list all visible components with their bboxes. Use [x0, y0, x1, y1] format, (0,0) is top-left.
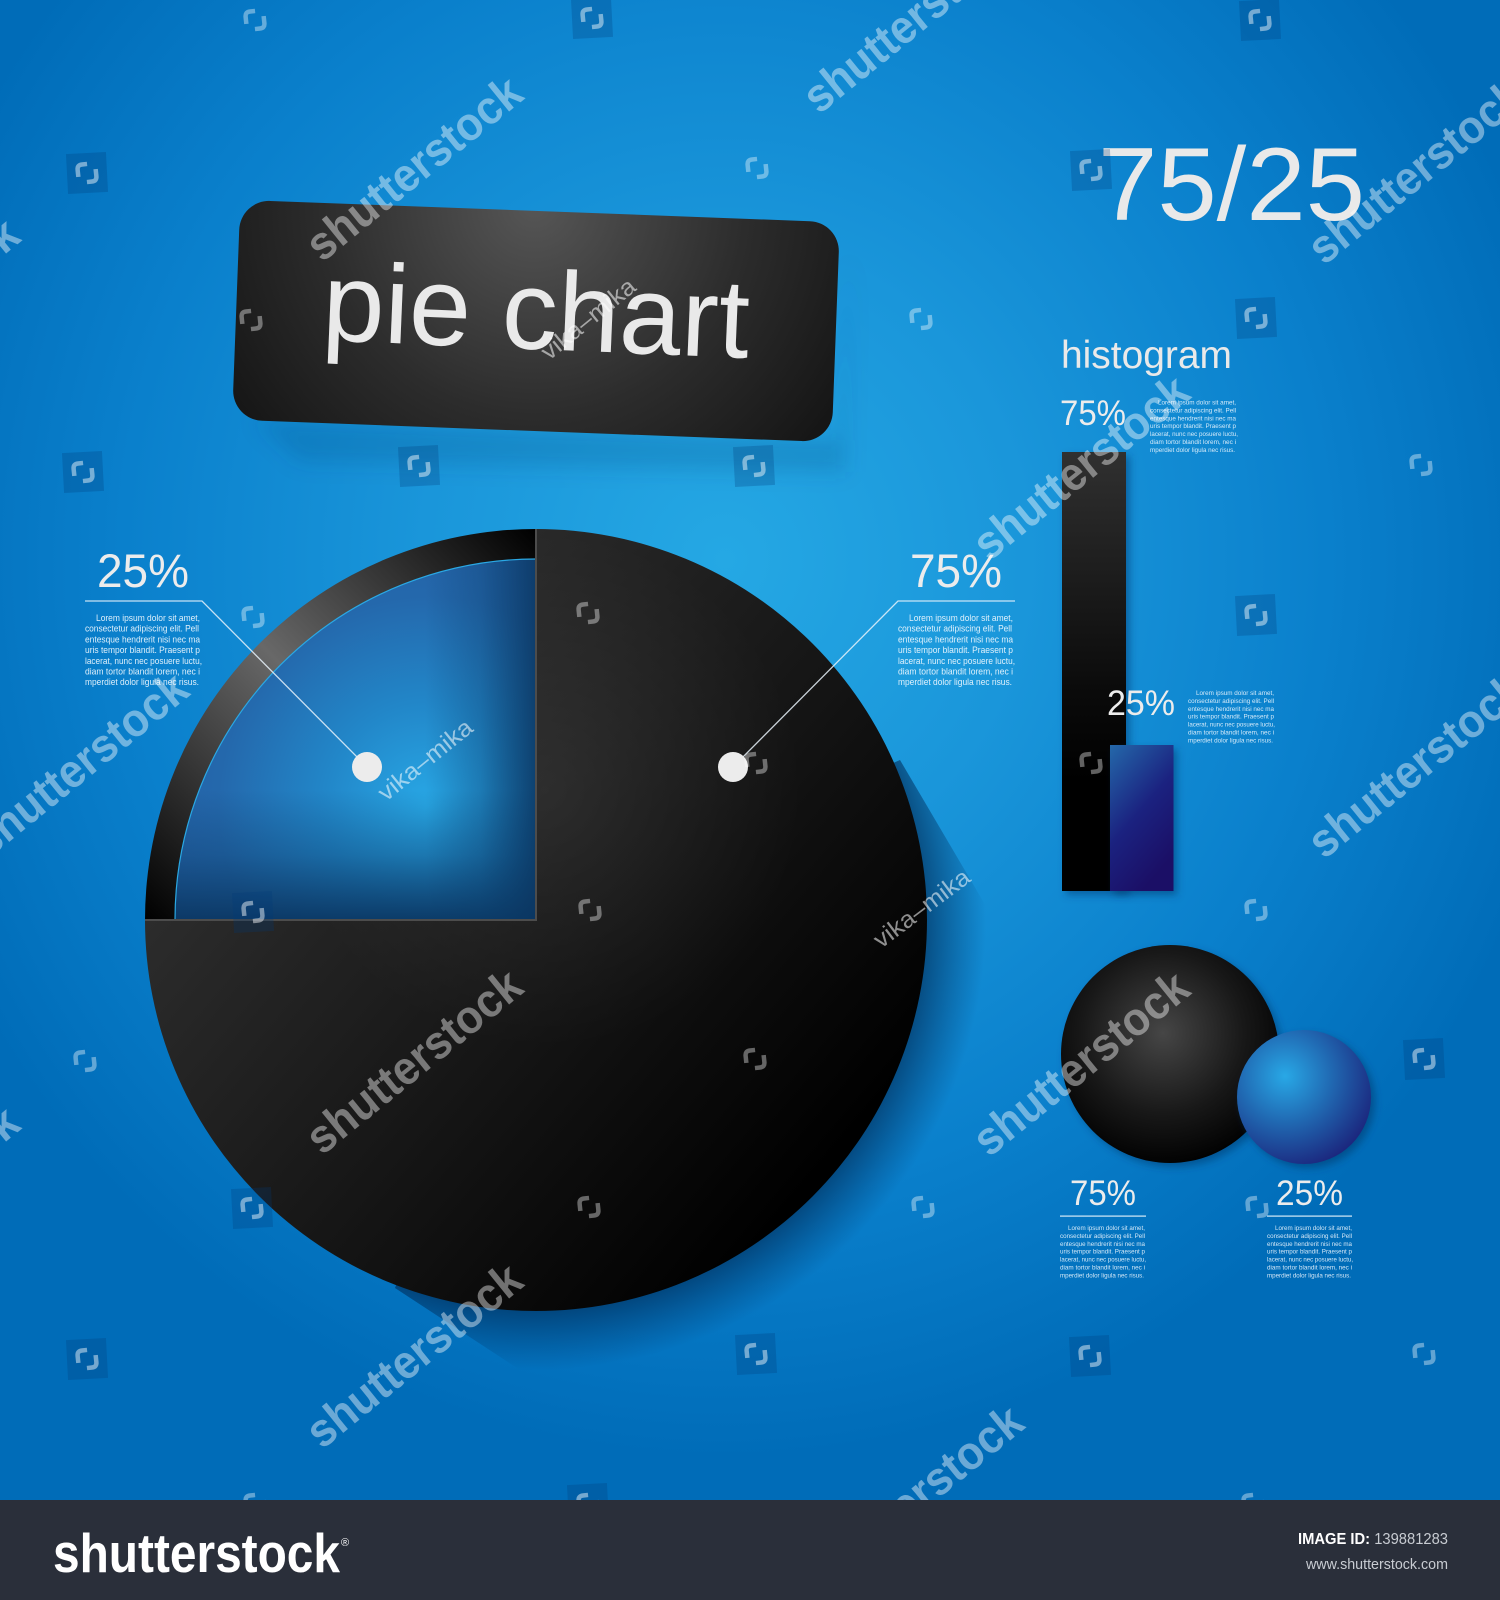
sphere label: 25%: uris tempor blandit. Praesent p [1267, 1249, 1352, 1256]
text: histogram 25% description: diam tortor blandit lorem, nec i [1188, 730, 1274, 736]
text: histogram 25% description: Lorem ipsum dolor sit amet, [1196, 690, 1274, 697]
sphere: black 75% [1061, 945, 1283, 1167]
callout: 75%: uris tempor blandit. Praesent p [898, 645, 1013, 655]
slice: 25% blue quadrant [145, 529, 536, 920]
label: histogram 75%: 75% [1060, 394, 1126, 433]
slice: 25% outer ring [145, 529, 536, 920]
footer image id: IMAGE ID: 139881283 [1298, 1531, 1448, 1548]
pie shadow [395, 760, 1000, 1382]
text: histogram 75% description: entesque hendrerit nisi nec ma [1150, 415, 1236, 422]
text: histogram 75% description: Lorem ipsum dolor sit amet, [1158, 400, 1236, 406]
text: histogram 25% description: entesque hendrerit nisi nec ma [1188, 706, 1274, 713]
watermark text: shutterstock [295, 1251, 533, 1458]
sphere label: 25%: lacerat, nunc nec posuere luctu, [1267, 1257, 1353, 1264]
text: histogram 25% description: lacerat, nunc nec posuere luctu, [1188, 722, 1275, 729]
text: histogram 75% description: uris tempor blandit. Praesent p [1150, 423, 1236, 430]
callout: 25%: consectetur adipiscing elit. Pell [85, 624, 199, 634]
callout: 25% [85, 544, 382, 782]
sphere label: 25%: consectetur adipiscing elit. Pell [1267, 1233, 1353, 1240]
sphere label: 75%: entesque hendrerit nisi nec ma [1060, 1241, 1145, 1248]
callout: 25%: diam tortor blandit lorem, nec i [85, 666, 200, 676]
footer logo: shutterstock [53, 1522, 340, 1584]
callout: 75%: entesque hendrerit nisi nec ma [898, 634, 1014, 644]
sphere label: 75%: Lorem ipsum dolor sit amet, [1068, 1225, 1145, 1232]
callout: 75% [718, 544, 1015, 782]
text: histogram 75% description [1150, 400, 1238, 454]
watermark text: shutterstock [796, 1393, 1034, 1600]
sphere label: 75%: 75% [1070, 1174, 1136, 1213]
text: histogram 75% description: lacerat, nunc nec posuere luctu, [1150, 431, 1238, 438]
watermark author text: vika–mika [536, 273, 642, 366]
callout: 75%: diam tortor blandit lorem, nec i [898, 666, 1013, 676]
pie chart [145, 529, 927, 1311]
callout: 75%: lacerat, nunc nec posuere luctu, [898, 656, 1015, 666]
watermark author text: vika–mika [868, 863, 976, 954]
footer registered mark: ® [341, 1537, 349, 1549]
sphere chart [1061, 945, 1375, 1168]
sphere label: 25%: Lorem ipsum dolor sit amet, [1275, 1225, 1352, 1232]
watermark author text: vika–mika [373, 714, 479, 807]
title label: pie chart: pie chart [320, 239, 752, 382]
callout: 25%: Lorem ipsum dolor sit amet, [96, 613, 200, 623]
text: histogram 25% description: consectetur adipiscing elit. Pell [1188, 698, 1275, 705]
histogram chart [1060, 394, 1275, 895]
footer bar [0, 1500, 1500, 1600]
callout: 75%: 75% [910, 544, 1002, 597]
callout: 75%: consectetur adipiscing elit. Pell [898, 624, 1012, 634]
sphere label: 75%: diam tortor blandit lorem, nec i [1060, 1264, 1145, 1272]
text: histogram 25% description: uris tempor blandit. Praesent p [1188, 714, 1274, 721]
text: histogram 25% description: mperdiet dolor ligula nec risus. [1188, 737, 1273, 744]
watermark text: shutterstock [962, 363, 1200, 570]
sphere label: 75%: uris tempor blandit. Praesent p [1060, 1249, 1145, 1256]
watermark text: shutterstock [962, 959, 1200, 1166]
sphere label: 75%: mperdiet dolor ligula nec risus. [1060, 1272, 1144, 1279]
bar: 25% [1110, 745, 1177, 895]
text: histogram 25% description [1188, 690, 1275, 744]
callout: 75%: Lorem ipsum dolor sit amet, [909, 613, 1013, 623]
sphere label: 25% [1267, 1174, 1353, 1279]
footer site url: www.shutterstock.com [1305, 1556, 1448, 1573]
sphere: blue 25% [1237, 1030, 1375, 1168]
text: histogram 75% description: diam tortor blandit lorem, nec i [1150, 439, 1236, 446]
callout: 75%: mperdiet dolor ligula nec risus. [898, 677, 1012, 687]
text: histogram 75% description: consectetur adipiscing elit. Pell [1150, 407, 1237, 414]
watermark text: shutterstock [295, 957, 533, 1164]
heading: 75/25: 75/25 [1098, 127, 1365, 243]
watermark text: shutterstock [295, 64, 533, 271]
callout: 25%: uris tempor blandit. Praesent p [85, 645, 200, 655]
callout: 25%: 25% [97, 544, 189, 597]
sphere label: 25%: diam tortor blandit lorem, nec i [1267, 1264, 1352, 1272]
sphere label: 25%: entesque hendrerit nisi nec ma [1267, 1241, 1352, 1248]
sphere label: 75% [1060, 1174, 1146, 1279]
label: histogram 25%: 25% [1107, 684, 1175, 723]
histogram heading: histogram [1061, 334, 1232, 377]
title label: pie chart [232, 200, 850, 472]
sphere label: 75%: consectetur adipiscing elit. Pell [1060, 1233, 1146, 1240]
sphere label: 25%: mperdiet dolor ligula nec risus. [1267, 1272, 1351, 1279]
callout: 25%: entesque hendrerit nisi nec ma [85, 634, 201, 644]
callout: 25%: lacerat, nunc nec posuere luctu, [85, 656, 202, 666]
sphere label: 75%: lacerat, nunc nec posuere luctu, [1060, 1257, 1146, 1264]
slice: 75% [145, 529, 927, 1311]
sphere label: 25%: 25% [1276, 1174, 1343, 1213]
text: histogram 75% description: mperdiet dolor ligula nec risus. [1150, 447, 1235, 454]
watermark author text [373, 273, 976, 954]
callout: 25%: mperdiet dolor ligula nec risus. [85, 677, 199, 687]
bar: 75% [1062, 452, 1130, 895]
